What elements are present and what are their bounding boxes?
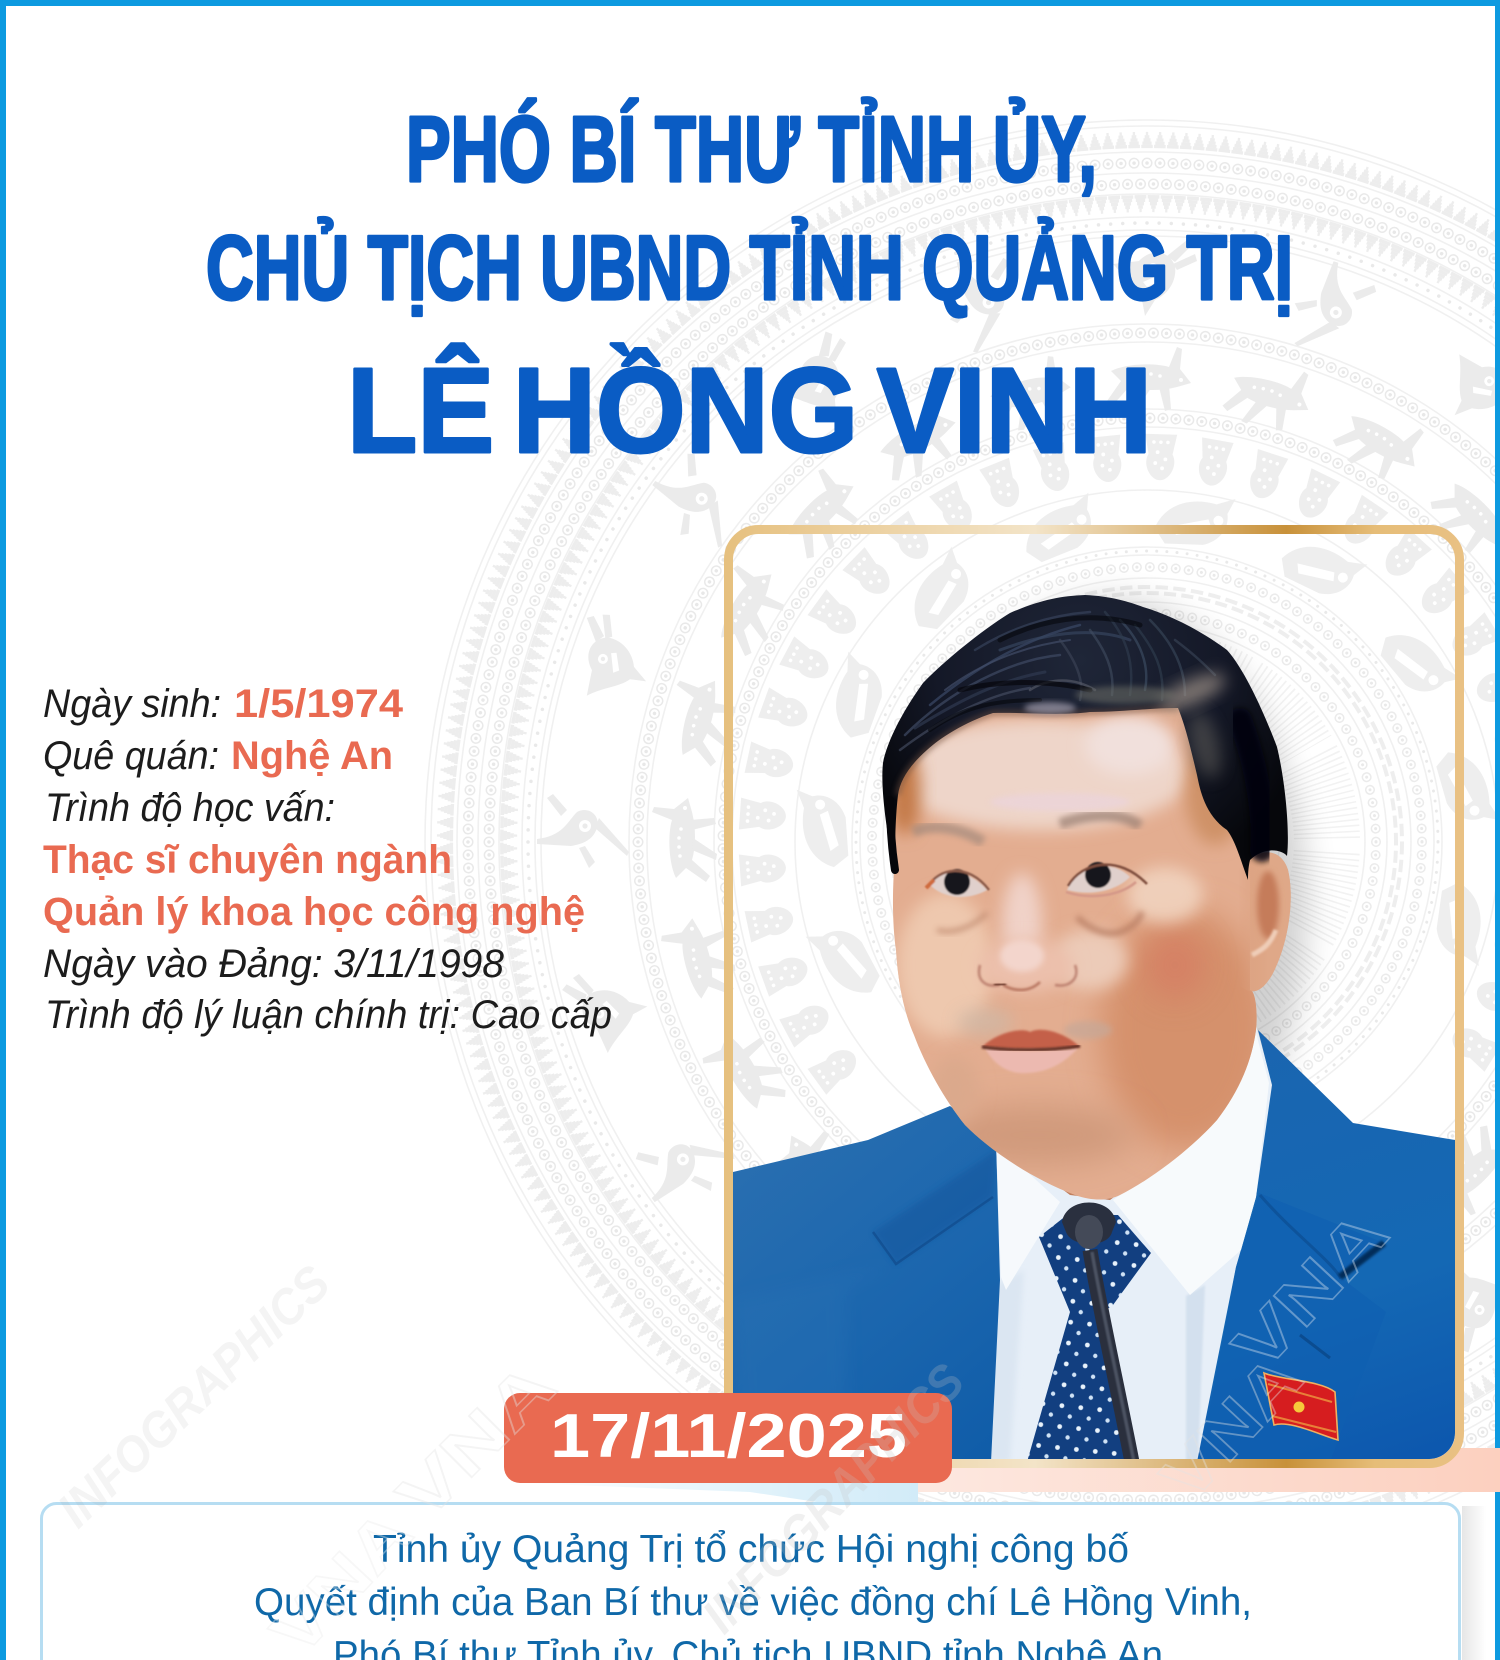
- eye bags: [937, 913, 987, 931]
- pink ribbon behind date: [918, 1448, 1500, 1492]
- panel shadow: [1462, 1506, 1486, 1660]
- biography text block: [43, 682, 612, 1037]
- circle bands: [468, 163, 1500, 1521]
- shirt: [975, 1025, 1272, 1462]
- large inner figures: [794, 488, 1500, 1007]
- hair: [882, 595, 1288, 880]
- thin ring lines: [425, 120, 1500, 1564]
- gray parting streak: [1154, 666, 1230, 718]
- head shadow: [1047, 586, 1320, 1086]
- gold photo frame: [728, 530, 1460, 1464]
- meander band: [892, 587, 1402, 1097]
- microphone: [1062, 1202, 1134, 1462]
- title line 3: name: LÊ HỒNG VINH: [347, 342, 1152, 478]
- hometown: Quê quán:: [43, 734, 219, 778]
- suit left side: [733, 1106, 1000, 1462]
- neck under jaw: [1064, 1190, 1114, 1200]
- mouth: [982, 1030, 1080, 1073]
- party admission date: Ngày vào Đảng: 3/11/1998: [43, 942, 505, 986]
- suit right side: [1197, 1030, 1460, 1462]
- announcement line 1: Tỉnh ủy Quảng Trị tổ chức Hội nghị công bố: [373, 1528, 1129, 1571]
- hometown: [43, 734, 393, 778]
- face: [892, 708, 1257, 1200]
- date pill: [504, 1393, 952, 1483]
- national assembly deputy pin: [1264, 1373, 1338, 1440]
- polka dot tie: [1027, 1215, 1151, 1462]
- heron and bird figures: [537, 240, 1500, 1444]
- radial hatching: [1214, 640, 1360, 1022]
- skin shading: [1100, 910, 1270, 1150]
- political theory level: Trình độ lý luận chính trị: Cao cấp: [45, 993, 612, 1037]
- watermark: VNA on suit: VNA: [1218, 1195, 1402, 1385]
- education: Quản lý khoa học công nghệ: [43, 890, 585, 934]
- panel: announcement: [42, 1504, 1460, 1660]
- title line 1: PHÓ BÍ THƯ TỈNH ỦY,: [406, 97, 1097, 201]
- portrait photo of Lê Hồng Vinh: [733, 595, 1460, 1462]
- title: [206, 97, 1293, 478]
- eyebrows: [913, 827, 983, 842]
- date of birth: [43, 682, 404, 726]
- outer triangle band: [439, 134, 1500, 1550]
- soft hairline: [898, 708, 1178, 795]
- date of birth: 1/5/1974: [234, 682, 404, 726]
- nose: [978, 940, 1076, 992]
- inner triangle band: [502, 197, 1500, 1487]
- right eye: [1066, 862, 1147, 896]
- blue strip below date pill: [520, 1483, 918, 1504]
- announcement line 2: Quyết định của Ban Bí thư về việc đồng chí Lê Hồng Vinh,: [254, 1581, 1252, 1624]
- background: Dong Son bronze drum pattern: [425, 120, 1500, 1564]
- deer figures: [652, 347, 1500, 1223]
- hometown: Nghệ An: [231, 734, 393, 778]
- shirt collars: [996, 1033, 1269, 1295]
- date: 17/11/2025: [550, 1402, 907, 1471]
- watermark: INFOGRAPHICS left: INFOGRAPHICS: [47, 1255, 340, 1538]
- watermark: VNA lower right: VNA: [1146, 1340, 1316, 1515]
- left eye: [926, 869, 989, 897]
- hair strands: [890, 612, 1263, 870]
- education: Trình độ học vấn:: [45, 786, 335, 830]
- ear back: [1250, 852, 1291, 992]
- education: Thạc sĩ chuyên ngành: [43, 838, 452, 882]
- education: [43, 786, 585, 934]
- watermark: VNA on pill: VNA: [383, 1347, 569, 1534]
- date of birth: Ngày sinh:: [43, 682, 221, 726]
- watermark: INFOGRAPHICS centre: INFOGRAPHICS: [692, 1353, 975, 1644]
- ear front: [1250, 852, 1291, 992]
- foot-shaped figures: [739, 434, 1500, 1095]
